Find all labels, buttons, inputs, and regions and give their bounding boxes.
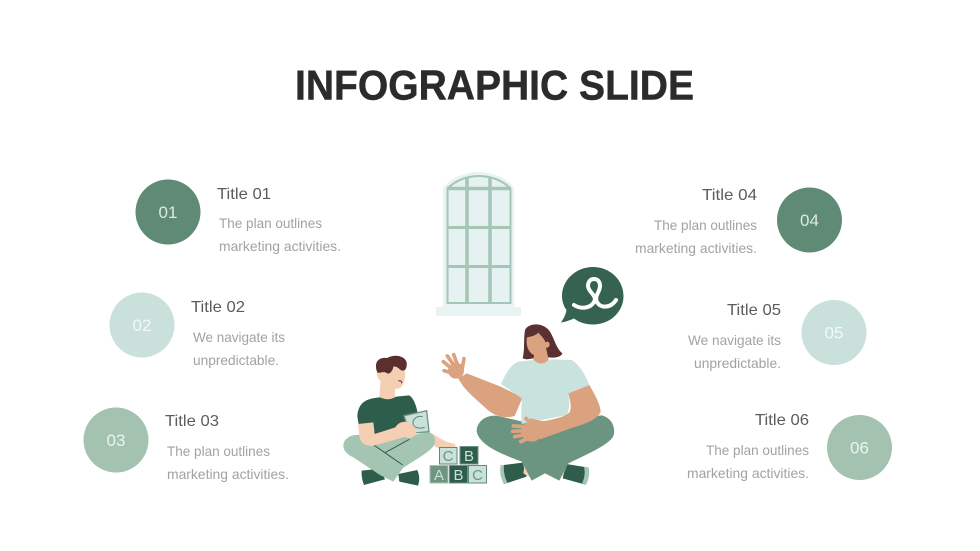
item 02: unpredictable.	[193, 352, 279, 368]
block A: A	[434, 467, 444, 484]
boy: neck	[379, 380, 395, 401]
item 02: 02	[133, 316, 151, 335]
item 03: The plan outlines	[167, 443, 270, 459]
blocks	[430, 446, 486, 484]
item 04: The plan outlines	[654, 217, 757, 233]
block C bottom: C	[472, 467, 483, 484]
woman: face	[527, 333, 550, 364]
boy: shirt	[357, 395, 418, 445]
illustration: boy with card	[343, 356, 456, 486]
item 03: marketing activities.	[167, 466, 289, 482]
boy: held card	[404, 411, 429, 433]
woman: right shoe	[563, 464, 588, 485]
woman: right hand	[513, 418, 542, 442]
item 04: Title 04	[702, 187, 757, 204]
item 02	[110, 292, 285, 368]
boy: near arm	[358, 422, 417, 446]
block B bottom: B	[453, 467, 464, 484]
item 05: unpredictable.	[694, 355, 781, 371]
woman: raised hand	[443, 355, 464, 379]
item 04: marketing activities.	[635, 240, 757, 256]
woman: left shoe	[500, 463, 527, 484]
item 02: We navigate its	[193, 329, 285, 345]
woman: left arm	[458, 373, 523, 417]
item 01: 01	[159, 203, 177, 222]
boy: crossed legs	[343, 432, 435, 482]
item 06: The plan outlines	[706, 442, 809, 458]
woman: crossed legs	[477, 415, 614, 481]
item 04	[635, 187, 842, 256]
item 05: We navigate its	[688, 332, 781, 348]
boy: hair	[376, 356, 407, 374]
item 01: Title 01	[217, 186, 271, 203]
item 04: 04	[800, 211, 819, 230]
item 03	[84, 408, 289, 482]
woman: upper body	[443, 324, 601, 442]
item 02: Title 02	[191, 299, 245, 316]
title: INFOGRAPHIC SLIDE	[295, 62, 694, 108]
woman: hair	[523, 324, 562, 359]
block B top: B	[464, 448, 474, 465]
boy: head	[377, 363, 405, 389]
boy: far arm reaching to blocks	[426, 432, 456, 449]
item 06	[687, 412, 892, 481]
boy: shoes	[362, 469, 419, 486]
item 05: Title 05	[727, 302, 781, 319]
item 01: The plan outlines	[219, 215, 322, 231]
item 03: 03	[107, 431, 125, 450]
woman: shirt	[501, 359, 589, 424]
woman: pants and shoes	[477, 415, 614, 485]
icon: speech bubble	[561, 267, 624, 324]
item 06: 06	[850, 438, 869, 458]
item 06: marketing activities.	[687, 465, 809, 481]
woman: right arm	[527, 385, 601, 439]
item 05	[688, 300, 866, 371]
icon: arched window	[436, 172, 521, 316]
item 01	[136, 180, 341, 254]
item 01: marketing activities.	[219, 238, 341, 254]
block C top: C	[443, 448, 454, 465]
item 03: Title 03	[165, 413, 219, 430]
item 06: Title 06	[755, 412, 809, 429]
item 05: 05	[825, 324, 843, 342]
